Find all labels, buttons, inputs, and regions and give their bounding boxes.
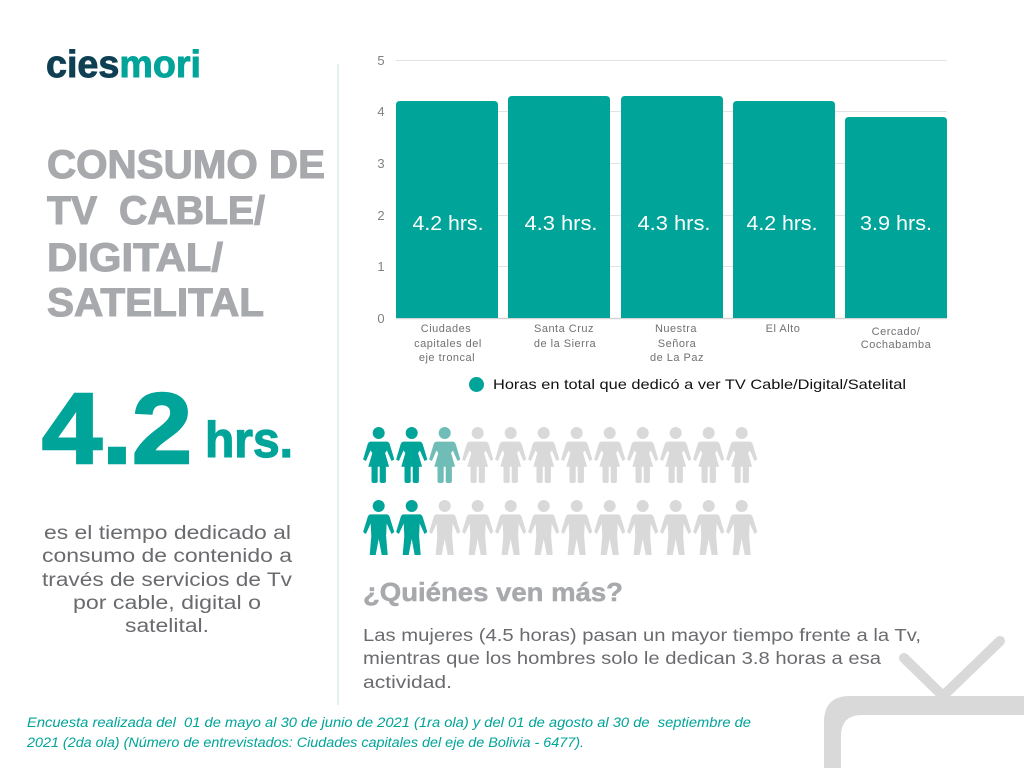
big stat: 4.2 hrs.: hrs. bbox=[205, 412, 293, 468]
bar values: 4.3 hrs. bbox=[524, 213, 598, 235]
footnote: Encuesta realizada del 01 de mayo al 30 de junio de 2021 (1ra ola) y del 01 de agosto al 30 de septiembre de bbox=[27, 715, 751, 730]
big stat: 4.2 hrs.: 4.2 bbox=[42, 373, 192, 485]
category labels: El Alto bbox=[766, 323, 800, 335]
title: TV CABLE/ bbox=[47, 189, 265, 233]
axis labels: 4 bbox=[377, 104, 385, 119]
decorative: vertical divider bbox=[337, 64, 339, 705]
axis labels bbox=[377, 53, 385, 326]
description text: consumo de contenido a bbox=[42, 546, 293, 567]
bar chart bbox=[377, 53, 947, 364]
category labels: Ciudades bbox=[421, 323, 471, 335]
bars bbox=[396, 96, 947, 318]
pictogram: hombres bbox=[363, 500, 757, 555]
category labels: Cercado/ bbox=[872, 326, 921, 338]
footnote: 2021 (2da ola) (Número de entrevistados: Ciudades capitales del eje de Bolivia - 6477). bbox=[26, 735, 584, 750]
heading: quienes ven mas: ¿Quiénes ven más? bbox=[363, 577, 623, 607]
description text: través de servicios de Tv bbox=[42, 570, 293, 591]
category labels: Santa Cruz bbox=[534, 323, 594, 335]
description text: es el tiempo dedicado al bbox=[44, 523, 291, 544]
description text: por cable, digital o bbox=[73, 593, 261, 614]
category labels: de la Sierra bbox=[534, 338, 597, 350]
bar values: 4.3 hrs. bbox=[638, 213, 710, 235]
description text bbox=[42, 523, 293, 637]
title: SATELITAL bbox=[47, 281, 264, 325]
title: DIGITAL/ bbox=[47, 236, 223, 280]
bar values: 4.2 hrs. bbox=[412, 213, 484, 235]
text: quienes ven mas: actividad. bbox=[363, 672, 452, 692]
category labels: Señora bbox=[658, 338, 697, 350]
text: quienes ven mas: Las mujeres (4.5 horas) pasan un mayor tiempo frente a la Tv, bbox=[363, 625, 921, 645]
decorative: tv icon bbox=[824, 641, 1024, 768]
pictogram: mujeres bbox=[363, 427, 757, 483]
bar values bbox=[412, 213, 932, 235]
category labels bbox=[414, 323, 932, 364]
axis labels: 5 bbox=[377, 53, 385, 68]
title: CONSUMO DE bbox=[47, 143, 325, 187]
category labels: Cochabamba bbox=[861, 339, 932, 351]
bar values: 3.9 hrs. bbox=[860, 213, 932, 235]
logo: ciesmori: ciesmori bbox=[46, 44, 201, 86]
axis labels: 2 bbox=[377, 208, 385, 223]
axis labels: 1 bbox=[377, 259, 385, 274]
legend: Horas en total que dedicó a ver TV Cable/Digital/Satelital bbox=[493, 376, 906, 392]
bar values: 4.2 hrs. bbox=[746, 213, 818, 235]
footnote bbox=[26, 715, 751, 750]
big stat: 4.2 hrs. bbox=[42, 373, 293, 485]
category labels: capitales del bbox=[414, 338, 482, 350]
title bbox=[47, 143, 325, 325]
text: quienes ven mas bbox=[363, 625, 921, 692]
description text: satelital. bbox=[125, 616, 209, 637]
axis labels: 3 bbox=[377, 156, 385, 171]
category labels: Nuestra bbox=[655, 323, 697, 335]
category labels: de La Paz bbox=[650, 352, 704, 364]
axis labels: 0 bbox=[377, 311, 385, 326]
text: quienes ven mas: mientras que los hombres solo le dedican 3.8 horas a esa bbox=[363, 648, 881, 668]
category labels: eje troncal bbox=[419, 352, 475, 364]
